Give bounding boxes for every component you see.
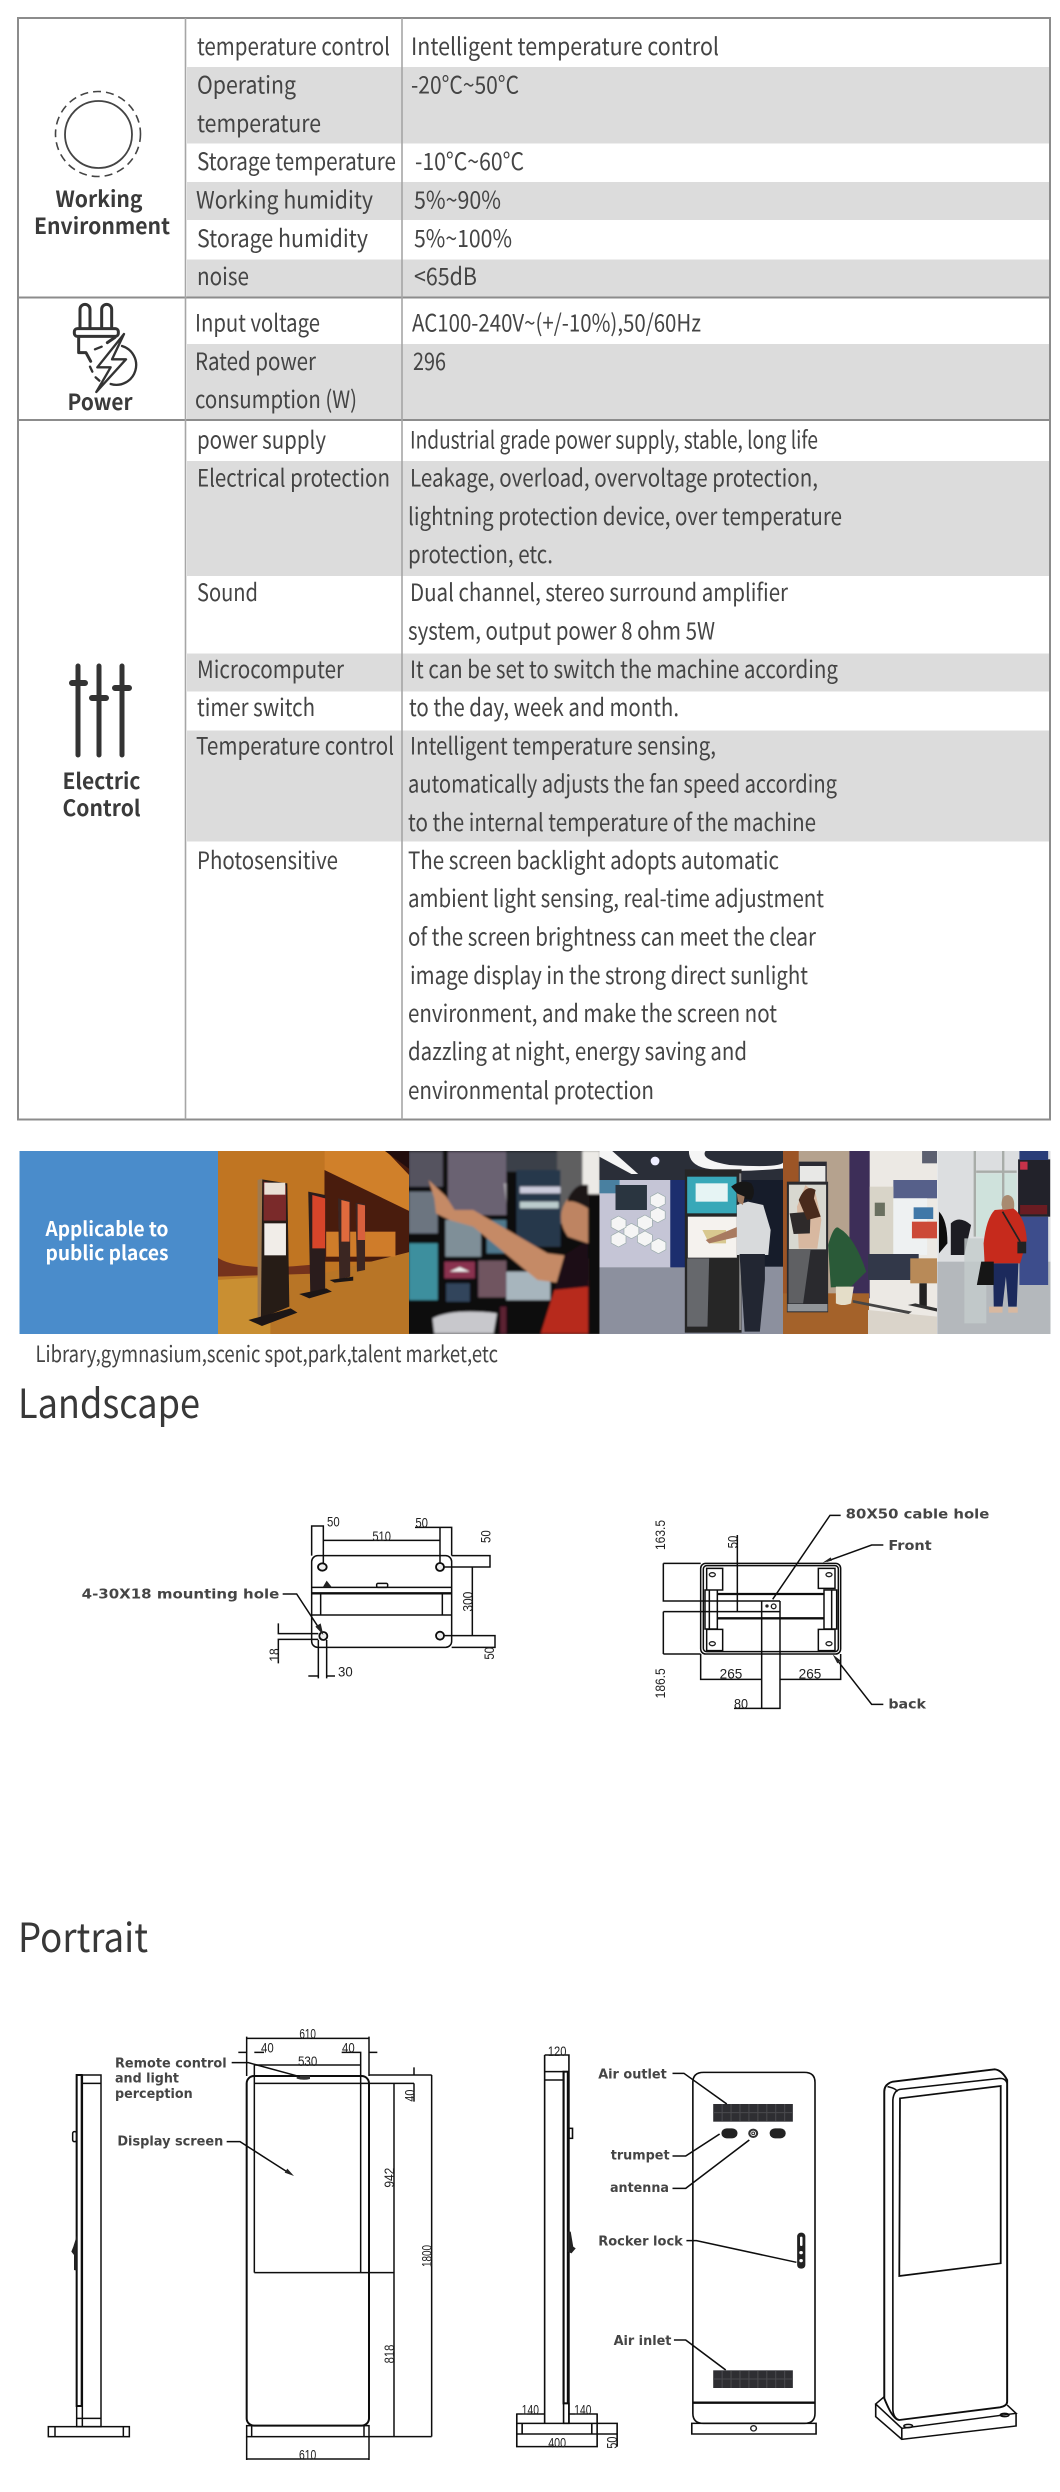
row: photosensitive: The screen backlight adopts automatic	[408, 841, 779, 876]
row: photosensitive: of the screen brightness can meet the clear	[408, 918, 817, 952]
callout: air outlet: Air outlet	[598, 2067, 667, 2083]
callout: display screen: Display screen	[117, 2135, 223, 2150]
row: electrical protection	[187, 458, 1049, 576]
side view dimensions: 120	[548, 2044, 566, 2060]
dimension labels: 40	[402, 2090, 418, 2102]
row: photosensitive: environmental protection	[408, 1071, 654, 1106]
callout: back	[833, 1654, 927, 1713]
row: sound: system, output power 8 ohm 5W	[408, 612, 715, 646]
side view	[48, 2075, 129, 2437]
photo: hotel lobby kiosks	[216, 1148, 412, 1335]
dimension labels: 50	[327, 1514, 340, 1530]
row: rated power consumption: 296	[413, 342, 446, 377]
icon: sliders	[72, 666, 129, 755]
row: rated power consumption: consumption (W)	[195, 380, 357, 415]
dimension labels: 610	[299, 2446, 316, 2462]
row: electrical protection: protection, etc.	[408, 535, 553, 570]
row: rated power consumption: Rated power	[195, 342, 317, 377]
row: temperature control: Intelligent temperature sensing,	[410, 726, 716, 762]
dimension labels: 265	[799, 1665, 822, 1681]
row: operating temperature	[187, 66, 1049, 144]
callout: air inlet: Air inlet	[614, 2333, 672, 2349]
callout: air outlet	[598, 2067, 727, 2104]
callout: display screen	[117, 2135, 294, 2176]
row: photosensitive: Photosensitive	[197, 841, 338, 876]
heading: electric control: Electric	[62, 764, 140, 796]
callout: rocker lock	[598, 2234, 796, 2262]
dimension labels	[266, 1514, 497, 1680]
row: temperature control: automatically adjusts the fan speed according	[408, 764, 837, 800]
row: photosensitive: image display in the strong direct sunlight	[410, 956, 808, 991]
photo: woman touching video wall	[406, 1148, 601, 1335]
heading: working environment	[34, 182, 170, 241]
row: microcomputer timer switch: It can be set to switch the machine according	[410, 650, 838, 685]
row: storage temperature: -10°C~60°C	[415, 142, 524, 177]
dimension labels	[652, 1520, 822, 1712]
label block	[20, 1151, 218, 1334]
panel: working environment	[34, 27, 1049, 297]
speakers	[721, 2128, 786, 2138]
dimension labels: 1800	[419, 2245, 435, 2267]
icon: temperature ring	[56, 92, 140, 176]
photo: kiosk with plant in mall	[783, 1148, 939, 1335]
callout: front	[823, 1539, 932, 1563]
row: sound	[197, 573, 789, 646]
row: temperature control: to the internal temperature of the machine	[408, 803, 816, 838]
dimension labels: 40	[342, 2040, 355, 2056]
row: power supply: power supply	[197, 420, 326, 456]
row: rated power consumption	[187, 342, 1049, 419]
row: noise	[187, 257, 1049, 297]
row: operating temperature: Operating	[197, 66, 296, 100]
callout: front: Front	[888, 1539, 932, 1554]
diagram: landscape base top view	[652, 1507, 989, 1713]
side view dimensions: 140	[574, 2403, 591, 2418]
side view dimensions: 50	[605, 2437, 621, 2449]
row: electrical protection: Leakage, overload, overvoltage protection,	[410, 458, 818, 494]
callout: trumpet: trumpet	[611, 2148, 670, 2164]
dimension labels	[261, 2026, 435, 2462]
heading: portrait: Portrait	[18, 1906, 148, 1964]
row: power supply: Industrial grade power supply, stable, long life	[410, 420, 818, 456]
dimension labels: 942	[381, 2167, 397, 2188]
rear view	[692, 2072, 816, 2434]
callout: air inlet	[614, 2333, 726, 2370]
dimension labels: 80	[734, 1696, 748, 1712]
callout: mounting hole: 4-30X18 mounting hole	[82, 1588, 279, 1603]
callout: antenna	[610, 2140, 749, 2196]
row: input voltage: AC100-240V~(+/-10%),50/60Hz	[412, 304, 701, 338]
diagram: portrait rear and perspective views	[517, 2044, 1016, 2452]
row: temperature control: temperature control	[197, 27, 390, 62]
callout: remote control and light perception: Remote control	[115, 2056, 227, 2071]
row: power supply	[197, 420, 818, 456]
row: temperature control	[197, 27, 719, 62]
label block: Applicable to	[45, 1213, 168, 1242]
row: microcomputer timer switch: Microcomputer	[197, 650, 345, 685]
side view	[517, 2044, 621, 2452]
row: photosensitive: ambient light sensing, real-time adjustment	[408, 879, 824, 914]
row: operating temperature: temperature	[197, 104, 321, 139]
air outlet grille	[713, 2104, 793, 2122]
dimension labels: 610	[299, 2026, 316, 2042]
perspective view	[876, 2069, 1016, 2439]
dimension labels: 40	[261, 2040, 274, 2056]
row: temperature control: Temperature control	[196, 726, 394, 762]
diagram: portrait side view and front view	[48, 2026, 435, 2462]
row: photosensitive	[197, 841, 824, 1106]
antenna	[749, 2130, 757, 2137]
callout: antenna: antenna	[610, 2180, 669, 2196]
row: sound: Dual channel, stereo surround amplifier	[410, 573, 789, 608]
dimension labels: 50	[478, 1530, 494, 1543]
dimension labels: 530	[298, 2053, 318, 2069]
row: input voltage: Input voltage	[195, 304, 320, 338]
panel: power	[68, 304, 1049, 419]
row: temperature control: Intelligent temperature control	[411, 27, 719, 62]
heading: power: Power	[68, 385, 133, 417]
dimension labels: 18	[266, 1648, 282, 1662]
callout: cable hole	[773, 1507, 989, 1599]
panel: electric control	[62, 420, 1049, 1106]
row: storage humidity	[197, 219, 512, 254]
diagram: landscape mounting holes	[82, 1514, 497, 1680]
dimension labels: 50	[481, 1647, 497, 1660]
callout: cable hole: 80X50 cable hole	[846, 1507, 989, 1522]
dimension labels: 163.5	[652, 1520, 668, 1550]
heading: electric control	[62, 764, 141, 823]
photo: man using kiosk in office	[599, 1148, 784, 1335]
row: microcomputer timer switch: to the day, week and month.	[409, 688, 679, 723]
row: microcomputer timer switch: timer switch	[197, 688, 315, 723]
heading: working environment: Working	[56, 182, 142, 214]
callout: remote control and light perception: and light	[115, 2072, 180, 2087]
row: noise: noise	[197, 257, 249, 292]
dimension labels: 50	[415, 1515, 428, 1531]
label block: public places	[46, 1237, 169, 1266]
air inlet grille	[713, 2370, 793, 2388]
row: working humidity	[187, 180, 1049, 220]
row: input voltage	[195, 304, 701, 338]
row: photosensitive: dazzling at night, energy saving and	[408, 1032, 747, 1067]
dimension labels: 186.5	[652, 1668, 668, 1698]
photo: traveller at airport gate	[937, 1148, 1052, 1335]
row: working humidity: Working humidity	[196, 180, 373, 216]
row: storage humidity: 5%~100%	[414, 219, 512, 254]
callout: remote control and light perception	[115, 2056, 300, 2102]
icon: plug with lightning	[74, 304, 136, 392]
row: microcomputer timer switch	[187, 650, 1049, 723]
row: electrical protection: Electrical protection	[197, 458, 390, 494]
row: operating temperature: -20°C~50°C	[411, 66, 519, 100]
rocker lock	[797, 2233, 805, 2269]
banner: applicable to public places	[20, 1148, 1052, 1335]
row: working humidity: 5%~90%	[414, 180, 501, 216]
dimension labels: 265	[720, 1665, 743, 1681]
heading: working environment: Environment	[34, 209, 170, 241]
side view dimensions: 140	[522, 2403, 539, 2418]
row: storage temperature: Storage temperature	[197, 142, 396, 177]
callout: trumpet	[611, 2134, 720, 2164]
row: sound: Sound	[197, 573, 258, 608]
callout: remote control and light perception: perception	[115, 2087, 193, 2102]
dimension labels: 300	[460, 1591, 476, 1612]
side view dimensions: 400	[548, 2436, 566, 2452]
callout: back: back	[888, 1698, 927, 1713]
heading: landscape: Landscape	[18, 1372, 200, 1430]
row: storage humidity: Storage humidity	[197, 219, 368, 254]
dimension labels: 510	[372, 1528, 391, 1544]
dimension labels: 30	[338, 1664, 353, 1680]
row: noise: <65dB	[414, 257, 477, 292]
row: temperature control	[187, 726, 1049, 842]
side view dimensions	[522, 2044, 621, 2452]
callout: rocker lock: Rocker lock	[598, 2234, 684, 2249]
row: electrical protection: lightning protection device, over temperature	[408, 497, 842, 532]
front view	[238, 2037, 432, 2460]
heading: electric control: Control	[62, 791, 141, 823]
dimension labels: 50	[725, 1535, 741, 1548]
row: photosensitive: environment, and make the screen not	[408, 994, 777, 1029]
callout: mounting hole	[82, 1588, 323, 1635]
caption: Library,gymnasium,scenic spot,park,talent market,etc	[36, 1337, 498, 1369]
dimension labels: 818	[381, 2344, 397, 2363]
